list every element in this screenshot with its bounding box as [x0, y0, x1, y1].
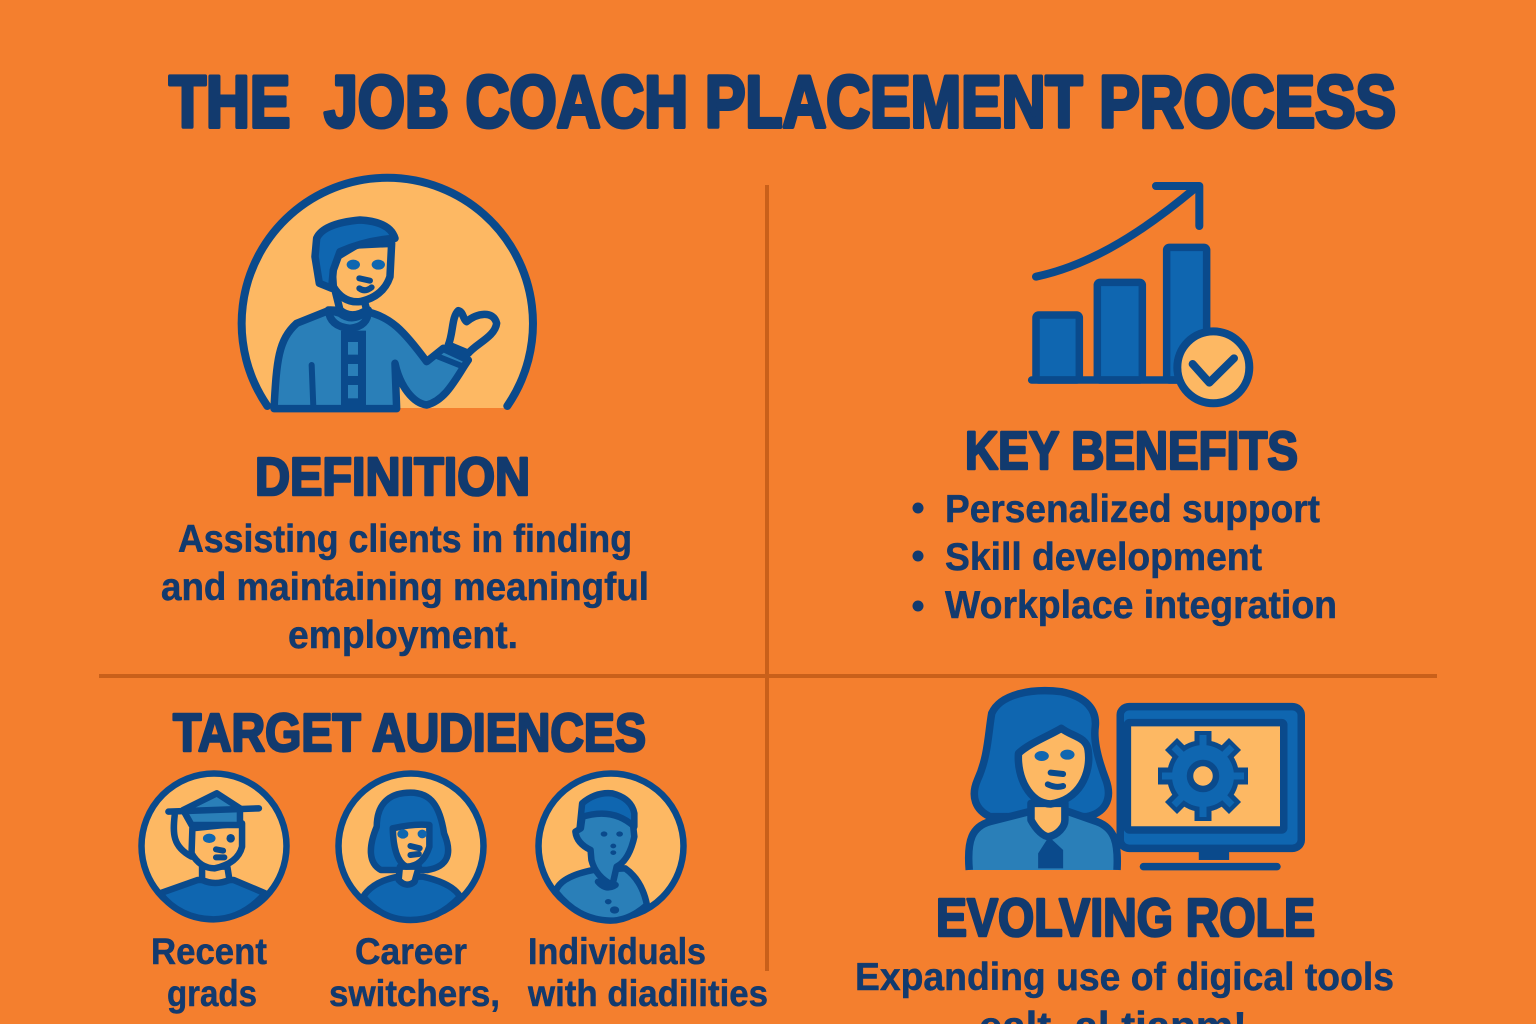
- label: individuals with disabilities: with diadilities: [527, 973, 768, 1014]
- panel: target audiences: [142, 703, 768, 1014]
- icon: career switcher: [338, 774, 484, 920]
- icon: gear: [1158, 731, 1248, 821]
- evolving role text: [855, 956, 1394, 1024]
- label: recent grads: [151, 931, 267, 1014]
- definition text: employment.: [288, 614, 518, 657]
- definition text: Assisting clients in finding: [178, 518, 632, 561]
- benefits list: Persenalized support: [945, 488, 1320, 531]
- label: recent grads: grads: [167, 973, 257, 1014]
- panel: evolving role: [855, 691, 1394, 1024]
- benefits list: Workplace integration: [945, 584, 1337, 627]
- evolving role text: Expanding use of digical tools: [855, 956, 1394, 999]
- icon: woman at monitor with gear: [969, 691, 1301, 870]
- benefits list: [912, 488, 1337, 627]
- icon: individual with disabilities: [538, 774, 684, 921]
- heading: evolving role: EVOLVING ROLE: [936, 888, 1315, 948]
- panel: key benefits: [912, 186, 1337, 627]
- heading: target audiences: TARGET AUDIENCES: [173, 703, 646, 763]
- icon: coach in circle: [242, 178, 533, 409]
- heading: definition: DEFINITION: [255, 447, 530, 507]
- icon: bar chart with arrow and check: [1032, 186, 1249, 403]
- benefits list: Skill development: [945, 536, 1262, 579]
- panel: definition: [161, 178, 649, 657]
- label: individuals with disabilities: Individuals: [528, 931, 706, 972]
- label: recent grads: Recent: [151, 931, 267, 972]
- definition text: and maintaining meaningful: [161, 566, 649, 609]
- definition text: [161, 518, 649, 657]
- label: career switchers: Career: [355, 931, 467, 972]
- label: career switchers: [329, 931, 500, 1014]
- label: career switchers: switchers,: [329, 973, 500, 1014]
- label: individuals with disabilities: [527, 931, 768, 1014]
- heading: key benefits: KEY BENEFITS: [965, 421, 1298, 481]
- icon: recent graduate: [142, 774, 286, 919]
